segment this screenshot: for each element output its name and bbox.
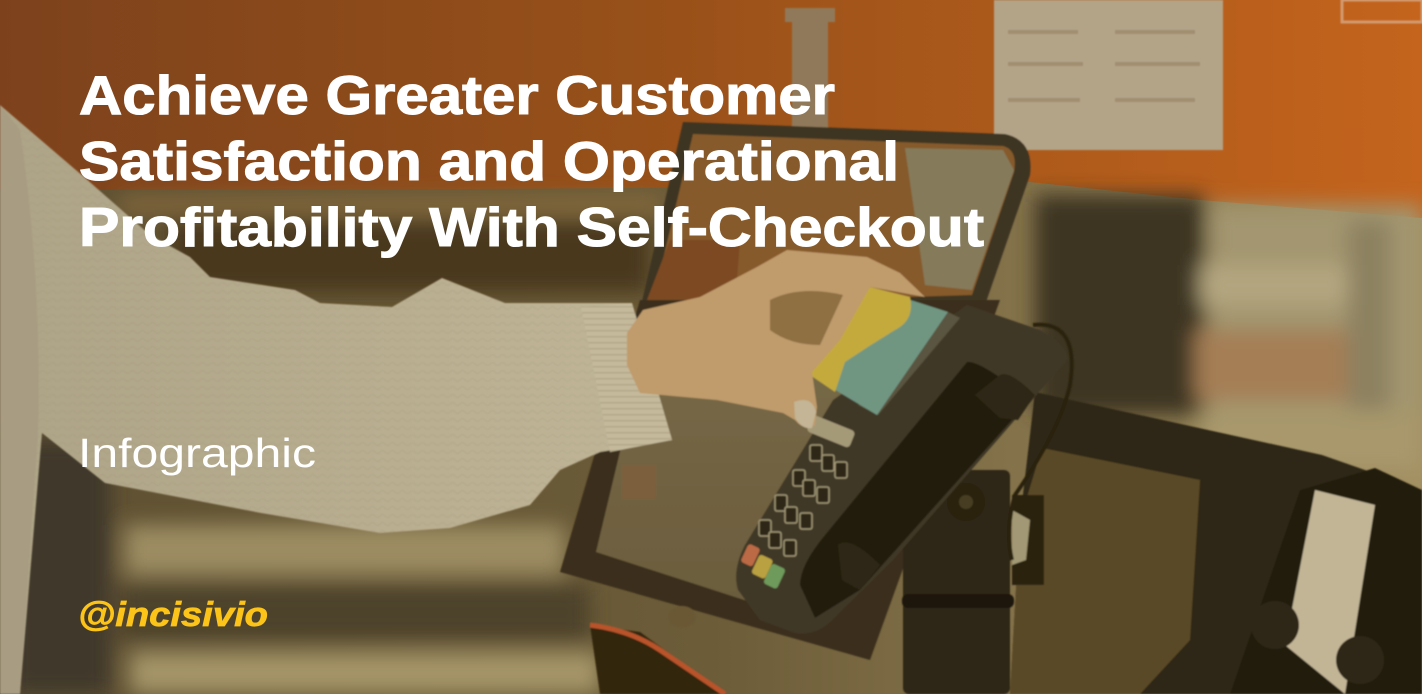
payment card bbox=[807, 287, 948, 415]
orange back wall bbox=[0, 0, 1422, 218]
keypad bbox=[740, 414, 856, 589]
title bbox=[79, 64, 984, 258]
hand holding card bbox=[627, 250, 925, 428]
terminal stand bbox=[902, 325, 1072, 694]
self-checkout monitor bbox=[560, 122, 1030, 660]
sign corner on wall bbox=[1342, 0, 1422, 22]
blurred store background bbox=[10, 195, 1422, 694]
title: Satisfaction and Operational bbox=[79, 130, 899, 192]
paper notice on wall bbox=[994, 0, 1223, 150]
checkout base unit bbox=[1010, 392, 1422, 694]
payment terminal bbox=[736, 305, 1067, 634]
pole behind monitor bbox=[785, 8, 835, 128]
subtitle: Infographic bbox=[78, 430, 316, 476]
title: Achieve Greater Customer bbox=[79, 64, 835, 126]
title: Profitability With Self-Checkout bbox=[79, 196, 984, 258]
sweater sleeve bbox=[0, 105, 672, 694]
red-edged device at bottom bbox=[590, 625, 725, 694]
brand handle: @incisivio bbox=[78, 596, 268, 634]
